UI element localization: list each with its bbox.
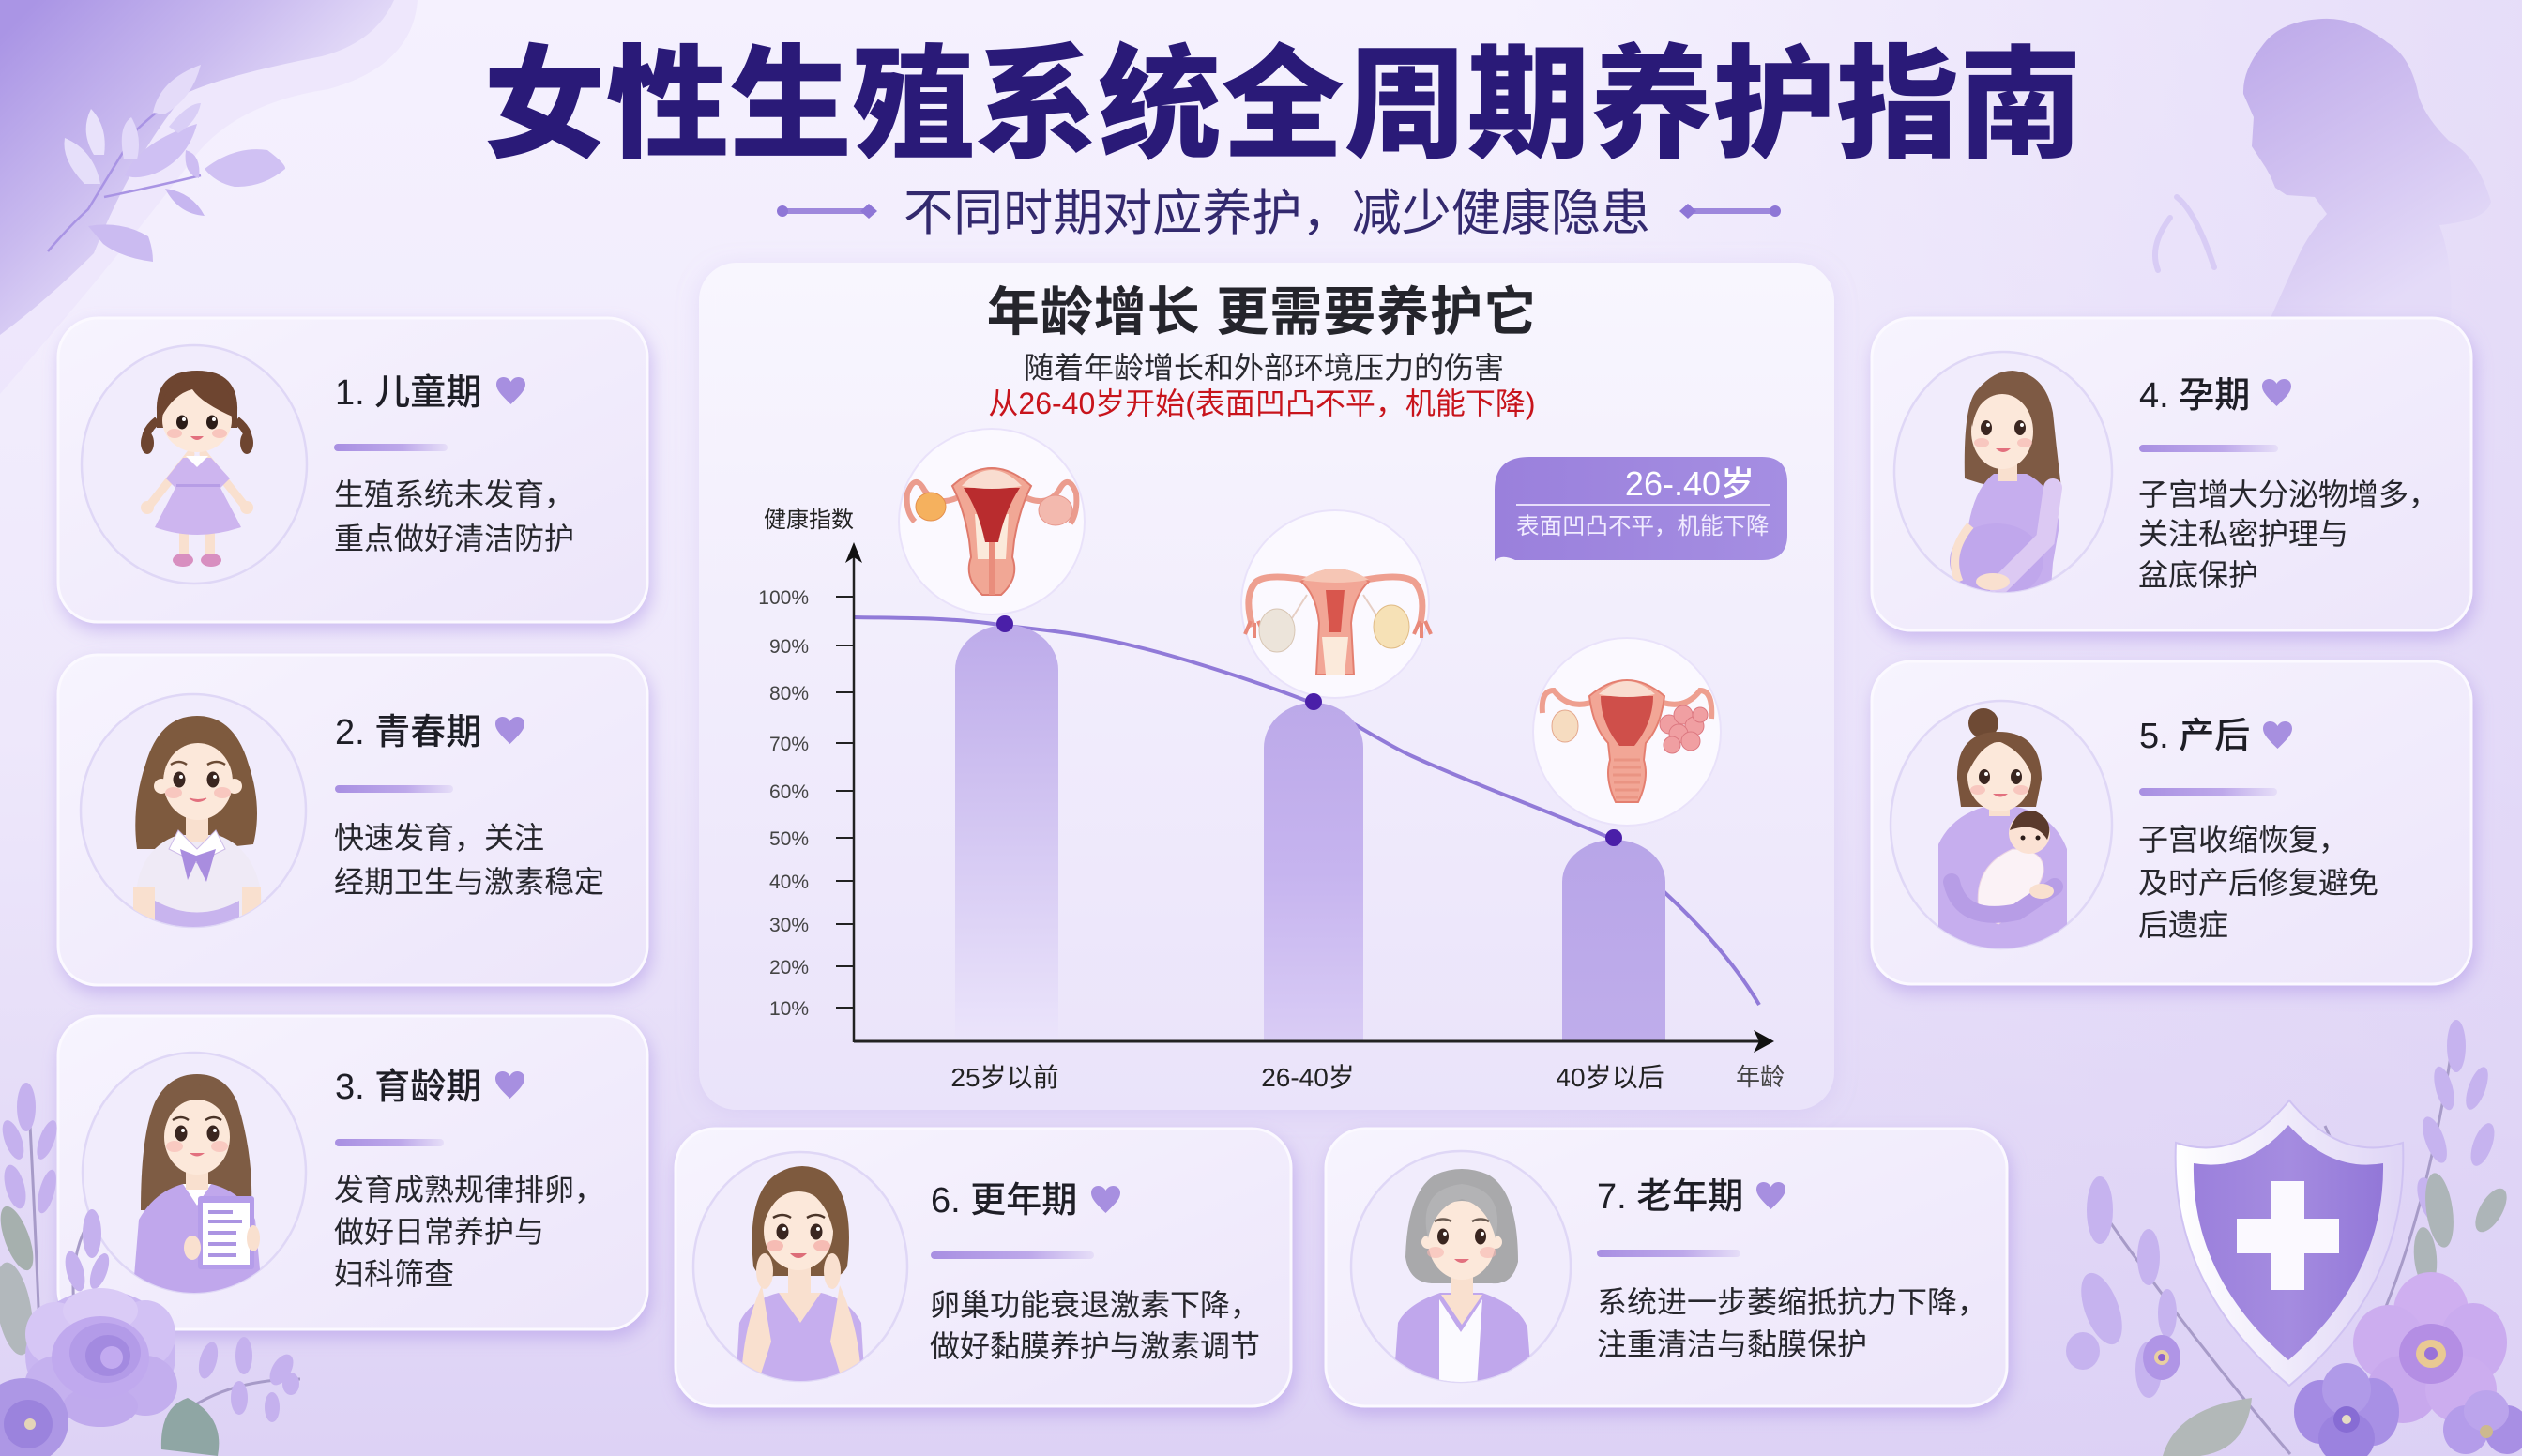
y axis labels <box>758 587 809 1020</box>
heading: 2. 青春期 <box>335 713 481 752</box>
right ornament <box>1679 204 1781 219</box>
card 6: 更年期 <box>676 1129 1291 1406</box>
organ illustration: aged uterus <box>1533 638 1721 826</box>
description: 注重清洁与黏膜保护 <box>1597 1327 1867 1361</box>
description: 妇科筛查 <box>334 1257 454 1291</box>
divider bar <box>931 1251 1094 1259</box>
heart icon <box>496 377 525 404</box>
description <box>334 1173 604 1291</box>
bar: 40岁以后 <box>1562 840 1665 1041</box>
y axis labels: 90% <box>769 636 809 658</box>
heading: 4. 孕期 <box>2139 376 2250 416</box>
y axis with ticks <box>836 542 862 1042</box>
description: 关注私密护理与 <box>2138 517 2348 551</box>
divider bar <box>2139 445 2278 452</box>
y axis labels: 40% <box>769 872 809 893</box>
avatar: adult woman with clipboard <box>83 1053 306 1299</box>
heart icon <box>495 717 524 744</box>
description <box>2138 823 2378 942</box>
subtitle: 不同时期对应养护，减少健康隐患 <box>904 186 1650 241</box>
decoration: bottom-right flowers <box>2143 1272 2522 1456</box>
description: 系统进一步萎缩抵抗力下降， <box>1597 1285 1987 1319</box>
heart icon <box>2263 721 2292 749</box>
icon: shield with medical cross <box>2176 1100 2403 1386</box>
flower: large rose <box>24 1288 177 1427</box>
description <box>1597 1285 1987 1361</box>
avatar: mother with baby <box>1891 701 2112 952</box>
description: 盆底保护 <box>2138 558 2258 592</box>
heart icon <box>2262 379 2291 406</box>
description: 及时产后修复避免 <box>2138 866 2378 900</box>
heart icon <box>495 1071 524 1099</box>
flower: lower-left <box>0 1378 68 1456</box>
flower: small left <box>2143 1335 2180 1380</box>
organ illustration: declining uterus <box>1241 510 1431 698</box>
description: 做好黏膜养护与激素调节 <box>930 1329 1260 1363</box>
x axis labels <box>950 1063 1785 1092</box>
heading: 6. 更年期 <box>931 1181 1077 1221</box>
health curve <box>854 617 1759 1005</box>
avatar: middle-aged woman <box>693 1152 907 1388</box>
heart icon <box>1756 1182 1785 1209</box>
data points <box>996 615 1622 846</box>
callout: 26-40岁: 表面凹凸不平，机能下降 <box>1516 513 1770 539</box>
x axis labels: 26-40岁 <box>1261 1063 1355 1092</box>
card 1: 儿童期 <box>58 318 647 622</box>
heading: 5. 产后 <box>2139 717 2250 756</box>
flower: large <box>2353 1272 2507 1423</box>
heading: 7. 老年期 <box>1597 1177 1743 1217</box>
x axis labels: 40岁以后 <box>1556 1063 1664 1092</box>
divider bar <box>335 785 453 793</box>
description: 做好日常养护与 <box>334 1215 544 1249</box>
divider bar <box>334 444 448 451</box>
avatar: elderly woman <box>1351 1151 1571 1388</box>
description <box>930 1288 1260 1363</box>
heading: 3. 育龄期 <box>335 1068 481 1107</box>
avatar: child <box>82 345 307 584</box>
callout: 26-40岁: 26-.40岁 <box>1625 464 1755 503</box>
red note: 从26-40岁开始(表面凹凸不平，机能下降) <box>988 387 1536 420</box>
cross <box>2237 1181 2339 1290</box>
y axis title: 健康指数 <box>764 508 854 533</box>
description: 后遗症 <box>2138 908 2228 942</box>
divider bar <box>335 1139 444 1146</box>
description: 子宫收缩恢复， <box>2138 823 2348 857</box>
x axis labels: 25岁以前 <box>950 1063 1059 1092</box>
flower: lower right <box>2443 1390 2522 1454</box>
callout: 26-40岁 <box>1495 457 1787 561</box>
description: 卵巢功能衰退激素下降， <box>930 1288 1260 1322</box>
description: 生殖系统未发育， <box>334 478 574 511</box>
flower: lower centre <box>2294 1363 2399 1456</box>
description: 子宫增大分泌物增多， <box>2138 478 2438 511</box>
card 4: 孕期 <box>1872 318 2471 630</box>
description <box>334 478 574 555</box>
y axis labels: 20% <box>769 957 809 978</box>
bar: 25岁以前 <box>955 625 1058 1041</box>
heart icon <box>1091 1186 1120 1213</box>
decoration: top-left leaf sprig <box>48 65 285 262</box>
panel: central chart <box>699 263 1834 1110</box>
card 3: 育龄期 <box>58 1016 647 1329</box>
heading: 1. 儿童期 <box>335 373 481 413</box>
bar: 26-40岁 <box>1264 703 1363 1041</box>
y axis labels: 80% <box>769 683 809 705</box>
divider bar <box>2139 788 2277 796</box>
y axis labels: 60% <box>769 781 809 803</box>
card 2: 青春期 <box>58 655 647 985</box>
card 5: 产后 <box>1872 661 2471 984</box>
divider bar <box>1597 1250 1740 1257</box>
y axis labels: 50% <box>769 828 809 850</box>
y axis labels: 30% <box>769 915 809 936</box>
left ornament <box>777 204 877 219</box>
decoration: woman silhouette top right <box>2155 19 2491 318</box>
description: 发育成熟规律排卵， <box>334 1173 604 1206</box>
panel heading: 年龄增长 更需要养护它 <box>987 282 1537 341</box>
decoration: bottom-left flowers <box>0 1083 300 1456</box>
description: 快速发育，关注 <box>334 821 544 855</box>
x axis <box>854 1030 1774 1053</box>
x axis labels: 年龄 <box>1736 1063 1785 1091</box>
avatar: pregnant woman <box>1894 352 2112 600</box>
decoration: top-left swoosh <box>0 0 418 394</box>
decoration: bottom-right sprigs and leaves <box>2066 1020 2513 1456</box>
card 7: 老年期 <box>1326 1129 2007 1406</box>
y axis labels: 100% <box>758 587 809 609</box>
avatar: teen girl <box>81 694 306 938</box>
description: 重点做好清洁防护 <box>334 522 574 555</box>
description <box>2138 478 2438 592</box>
organ illustration: healthy uterus <box>899 429 1085 614</box>
title: 女性生殖系统全周期养护指南 <box>483 36 2082 174</box>
description <box>334 821 604 899</box>
y axis labels: 70% <box>769 734 809 755</box>
description: 经期卫生与激素稳定 <box>334 865 604 899</box>
y axis labels: 10% <box>769 998 809 1020</box>
panel subheading: 随着年龄增长和外部环境压力的伤害 <box>1024 351 1504 385</box>
